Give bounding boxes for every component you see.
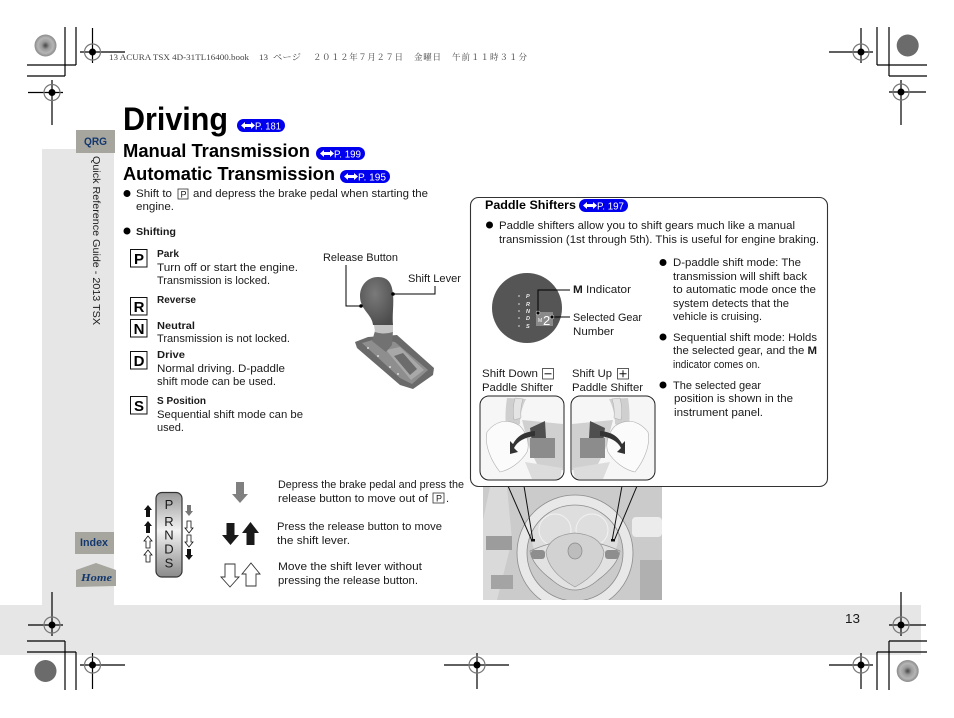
shift pattern diagram: D (164, 542, 174, 556)
label: shift down paddle (482, 368, 554, 394)
intro bullet: P (180, 190, 187, 200)
label: release button: Release Button (323, 252, 398, 264)
intro bullet (124, 188, 428, 213)
bullet: selected gear: The selected gear (673, 380, 761, 392)
gear position D: Drive (157, 350, 185, 361)
shift pattern diagram: N (164, 528, 174, 542)
label: shift down paddle: Shift Down (482, 368, 538, 380)
gear position P: Transmission is locked. (157, 275, 270, 287)
gear position P: P (134, 251, 144, 268)
legend text: gray arrow (278, 479, 464, 505)
bullet: D-paddle shift mode: to automatic mode once the (673, 284, 816, 296)
instrument display: 2 (543, 313, 550, 328)
intro bullet: engine. (136, 201, 174, 213)
bullet: sequential shift mode: the selected gear, and the M (673, 345, 817, 357)
instrument display: P (526, 294, 530, 300)
gear position D: shift mode can be used. (157, 376, 276, 388)
arrows: black, release button (222, 522, 259, 545)
label: shift lever: Shift Lever (408, 273, 461, 285)
title: P. 181 (255, 122, 281, 132)
gear position S (130, 396, 303, 434)
panel heading (485, 199, 628, 212)
label: selected gear number: Selected Gear (573, 312, 642, 324)
sidebar: QRG tab: QRG (84, 136, 107, 148)
print header line: 午前１１時３１分 (452, 52, 527, 62)
label: release button (323, 252, 398, 308)
print header line: 13 (259, 52, 268, 62)
gear position P: Park (157, 249, 179, 260)
bullet: sequential shift mode: Sequential shift mode: Holds (673, 332, 818, 344)
gear position P (130, 249, 298, 287)
legend text: white arrows: Move the shift lever without (278, 561, 422, 573)
legend text: white arrows (278, 561, 422, 587)
arrow: gray, brake and release (232, 482, 248, 503)
heading: manual transmission: Manual Transmission (123, 141, 310, 161)
bullet: sequential shift mode (660, 332, 818, 371)
gear position S: used. (157, 422, 184, 434)
gear position D (130, 350, 285, 388)
sidebar: index tab (75, 532, 114, 554)
gear position N: Transmission is not locked. (157, 333, 290, 345)
bullet: D-paddle shift mode: vehicle is cruising. (673, 311, 762, 323)
label: selected gear number (550, 312, 642, 338)
gear position D: D (134, 353, 145, 370)
photo: left paddle (480, 396, 564, 480)
heading: manual transmission: P. 199 (334, 150, 361, 160)
gear position S: S (134, 398, 144, 415)
instrument display: N (526, 309, 531, 315)
bullet: selected gear: position is shown in the (674, 393, 793, 405)
shift pattern diagram: S (165, 556, 174, 570)
label: shift down paddle: Paddle Shifter (482, 382, 553, 394)
callout pointers (508, 486, 637, 542)
instrument display: M (538, 318, 542, 324)
instrument display (492, 273, 562, 343)
label: M indicator: M Indicator (573, 284, 631, 296)
instrument display: D (526, 316, 530, 322)
legend text: white arrows: pressing the release button. (278, 575, 418, 587)
sidebar: vertical label: Quick Reference Guide - 2013 TSX (90, 156, 102, 325)
gear position R (130, 295, 196, 316)
paddle intro bullet: transmission (1st through 5th). This is useful for engine braking. (499, 234, 819, 246)
page number: 13 (845, 611, 860, 626)
sidebar: QRG tab (76, 130, 115, 153)
shifting bullet: Shifting (136, 227, 176, 238)
illustration: shift lever (355, 277, 434, 389)
label: shift up paddle: Shift Up (572, 368, 612, 380)
shift pattern diagram: R (164, 514, 174, 529)
bullet: D-paddle shift mode: D-paddle shift mode: The (673, 257, 801, 269)
print header line: ２０１２年７月２７日 (313, 52, 403, 62)
panel: paddle shifters (470, 198, 828, 486)
shift pattern diagram (144, 492, 193, 577)
instrument display: R (526, 302, 530, 308)
bullet: D-paddle shift mode (660, 257, 816, 323)
arrows: white, no release button (221, 563, 260, 587)
sidebar: home tab (76, 563, 116, 587)
legend text: gray arrow: release button to move out of (278, 493, 429, 505)
paddle intro bullet (486, 220, 819, 246)
title: Driving (123, 101, 228, 137)
gear position N: N (134, 321, 144, 338)
label: selected gear number: Number (573, 326, 614, 338)
panel heading: Paddle Shifters (485, 200, 576, 212)
shift pattern diagram: P (165, 497, 173, 512)
legend text: black arrows (277, 521, 442, 547)
bullet: D-paddle shift mode: system detects that the (673, 298, 789, 310)
intro bullet: Shift to (136, 188, 172, 200)
photo: steering wheel (483, 487, 662, 611)
paddle intro bullet: Paddle shifters allow you to shift gears much like a manual (499, 220, 795, 232)
gear position R: R (134, 299, 145, 316)
gear position N: Neutral (157, 321, 195, 332)
label: M indicator (536, 284, 631, 315)
bullet: sequential shift mode: indicator comes on. (673, 359, 760, 371)
heading: automatic transmission: Automatic Transmission (123, 164, 335, 184)
panel heading: P. 197 (597, 202, 624, 212)
bullet: D-paddle shift mode: transmission will shift back (673, 271, 808, 283)
gear position S: Sequential shift mode can be (157, 409, 303, 421)
sidebar: home tab: Home (80, 572, 112, 584)
legend text: black arrows: Press the release button to move (277, 521, 442, 533)
print header line: 金曜日 (414, 52, 441, 62)
print header line: ページ (273, 52, 301, 62)
bullet: selected gear: instrument panel. (674, 407, 763, 419)
heading: automatic transmission: P. 195 (358, 172, 386, 184)
legend text: gray arrow: P (436, 494, 442, 504)
label: shift lever (391, 273, 461, 296)
gear position R: Reverse (157, 295, 196, 306)
gear position P: Turn off or start the engine. (157, 262, 298, 274)
print header line (109, 52, 527, 62)
instrument display: S (526, 324, 530, 330)
legend text: gray arrow: . (446, 493, 449, 505)
sidebar: index tab: Index (80, 537, 109, 549)
label: shift up paddle: Paddle Shifter (572, 382, 643, 394)
gear position N (130, 320, 290, 345)
gear position D: Normal driving. D-paddle (157, 363, 285, 375)
gray page bands (0, 149, 921, 655)
photo: right paddle (571, 396, 655, 480)
legend text: gray arrow: Depress the brake pedal and press the (278, 479, 464, 491)
label: shift up paddle (572, 368, 643, 394)
title (123, 101, 285, 137)
bullet: selected gear (660, 380, 793, 419)
gear position S: S Position (157, 396, 206, 407)
intro bullet: and depress the brake pedal when starting the (193, 188, 428, 200)
legend text: black arrows: the shift lever. (277, 535, 350, 547)
print header line: 13 ACURA TSX 4D-31TL16400.book (109, 52, 250, 62)
